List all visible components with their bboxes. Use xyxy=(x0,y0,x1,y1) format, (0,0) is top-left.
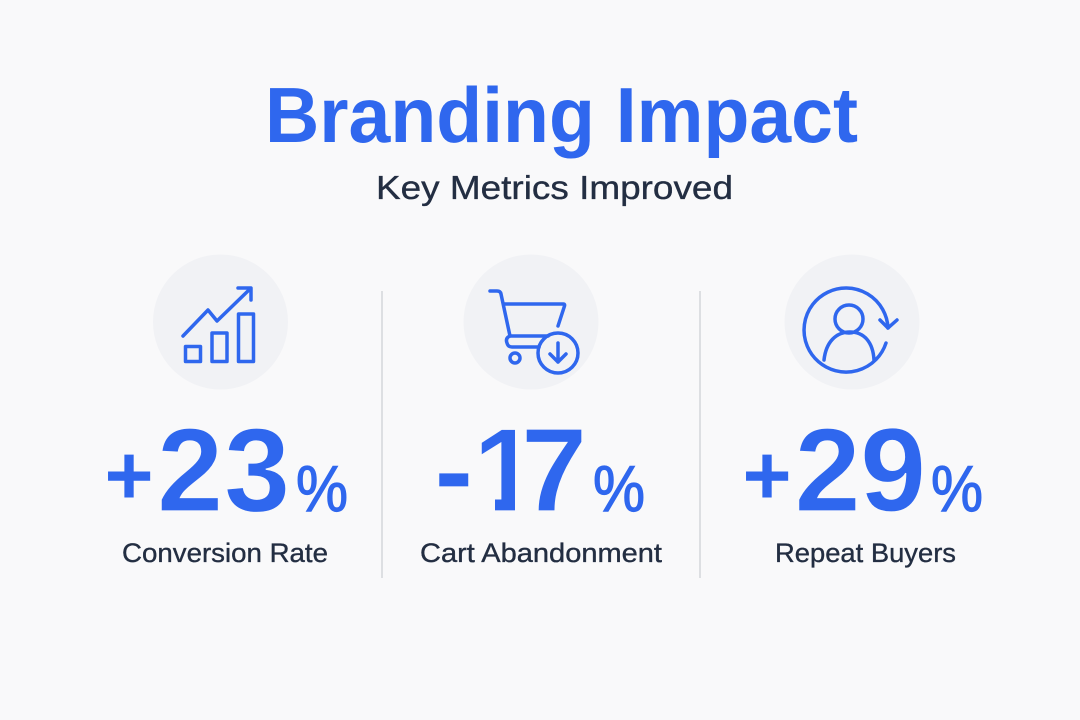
icon: customer with return arrow xyxy=(784,254,920,390)
panel: repeat buyers xyxy=(742,254,983,568)
label: cart abandonment: Cart Abandonment xyxy=(420,538,663,568)
metric: +23%: % xyxy=(296,452,348,525)
icon: rising bar chart xyxy=(153,254,288,390)
infographic canvas xyxy=(108,86,982,578)
icon: cart with down arrow xyxy=(464,254,598,390)
metric: -17% xyxy=(439,430,644,512)
metric: +29%: 29 xyxy=(794,404,926,537)
metric: -17%: -17 xyxy=(434,404,587,537)
title: Branding Impact xyxy=(265,71,858,159)
metric: +29%: + xyxy=(742,428,792,522)
panel: conversion rate xyxy=(104,254,348,568)
label: conversion rate: Conversion Rate xyxy=(122,538,328,568)
metric: +23% xyxy=(104,404,348,537)
panel: cart abandonment xyxy=(421,289,662,562)
metric: +29%: % xyxy=(931,452,983,525)
label: repeat buyers: Repeat Buyers xyxy=(775,538,956,568)
metric: +29% xyxy=(742,404,983,537)
subtitle: Key Metrics Improved xyxy=(376,169,733,206)
metric: -17%: % xyxy=(593,452,645,525)
metric: +23%: + xyxy=(104,428,154,522)
metric: +23%: 23 xyxy=(157,404,290,537)
